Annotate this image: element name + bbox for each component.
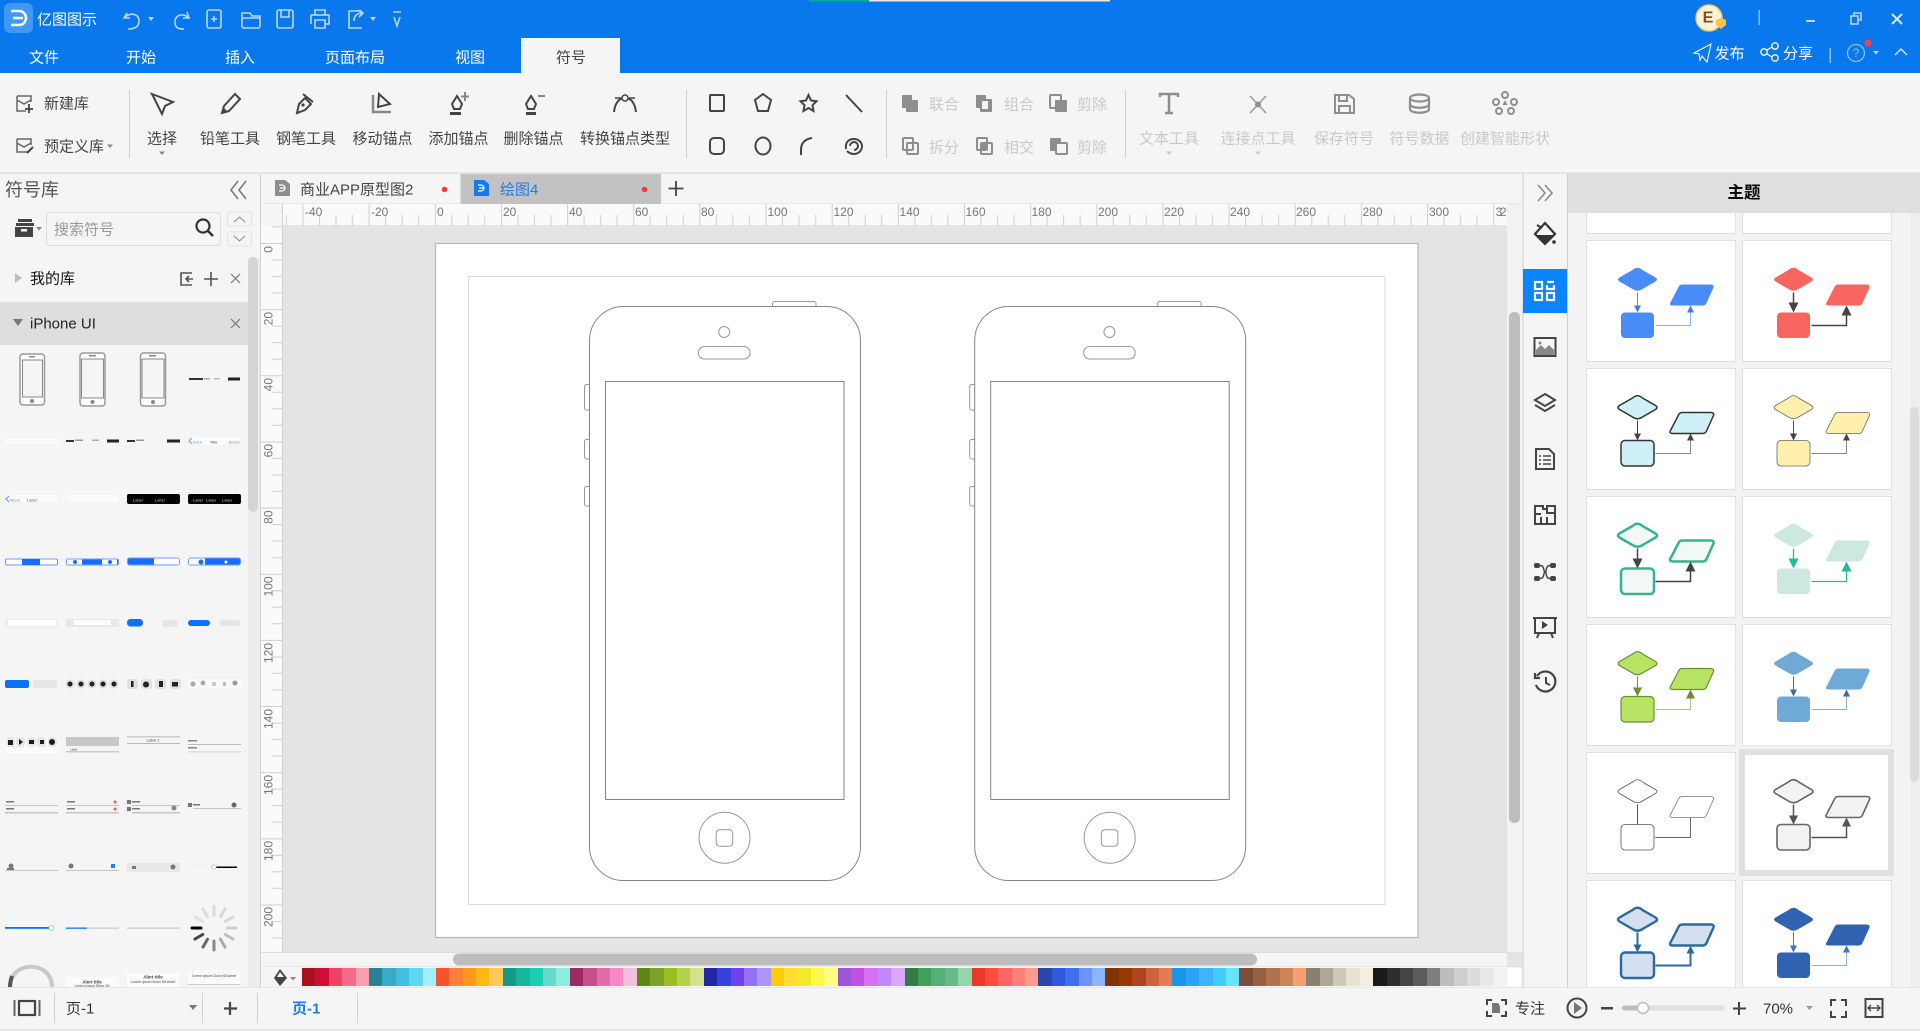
navigation bars: Label bbox=[222, 498, 232, 502]
tool: pen: 钢笔工具 bbox=[276, 130, 336, 148]
tool: save symbol: 保存符号 bbox=[1314, 130, 1374, 148]
tab: 商业APP原型图2: 商业APP原型图2 bbox=[300, 182, 413, 198]
vertical ruler: 40 bbox=[262, 378, 276, 391]
canvas scrollbars bbox=[261, 204, 1523, 987]
predefined library: 预定义库 bbox=[44, 138, 104, 156]
theme card: green outline bbox=[1586, 496, 1736, 618]
lists bbox=[5, 736, 241, 754]
horizontal ruler: 200 bbox=[1098, 205, 1118, 219]
tool: add anchor bbox=[428, 92, 489, 148]
menu tabs: 文件 bbox=[29, 50, 59, 66]
vertical ruler: 180 bbox=[262, 841, 276, 861]
page selector bbox=[66, 1000, 197, 1018]
lists: Label bbox=[70, 748, 78, 752]
vertical ruler: 100 bbox=[262, 576, 276, 597]
page bbox=[436, 244, 1418, 938]
tool: move anchor: 移动锚点 bbox=[352, 130, 413, 148]
window controls and user bbox=[1694, 5, 1907, 63]
icon: page view bbox=[14, 1000, 40, 1016]
navigation bars: Label bbox=[133, 498, 143, 502]
share button: 分享 bbox=[1783, 46, 1813, 62]
symbol thumbnails bbox=[5, 353, 241, 989]
theme card: cyan bbox=[1586, 368, 1736, 490]
new library: 新建库 bbox=[44, 96, 89, 112]
iphone ui row: iPhone UI bbox=[30, 316, 96, 332]
tool: pencil bbox=[200, 94, 260, 148]
panel: symbol library bbox=[0, 174, 261, 989]
shape tools bbox=[710, 94, 862, 155]
menu tabs: 开始 bbox=[126, 50, 156, 66]
phones bbox=[20, 353, 166, 406]
tool: delete anchor: 删除锚点 bbox=[503, 130, 564, 148]
theme card: yellow bbox=[1742, 368, 1892, 490]
tab: 绘图4 bbox=[461, 174, 661, 204]
vertical ruler: 120 bbox=[262, 643, 276, 663]
active page tab: 页-1 bbox=[292, 1000, 320, 1018]
theme card: navy bbox=[1742, 880, 1892, 987]
tool: text bbox=[1139, 94, 1199, 155]
horizontal ruler: 220 bbox=[1164, 205, 1184, 219]
tool: pen bbox=[276, 94, 336, 148]
boolean tools: 剪除 bbox=[1077, 96, 1107, 114]
tab: 商业APP原型图2 bbox=[275, 180, 447, 198]
sliders bbox=[5, 926, 180, 930]
icon: fullscreen bbox=[1831, 1000, 1846, 1017]
navigation bars: Label bbox=[193, 498, 203, 502]
panel: theme bbox=[1568, 174, 1920, 1002]
navigation bars: Label bbox=[27, 498, 37, 502]
tool: connection point bbox=[1220, 96, 1296, 155]
zoom control bbox=[1601, 1000, 1813, 1018]
menu tabs: 页面布局 bbox=[325, 50, 385, 66]
scrollbar bbox=[1910, 213, 1920, 988]
menu tabs: 符号 bbox=[556, 50, 586, 66]
horizontal ruler: 280 bbox=[1362, 205, 1383, 219]
vertical ruler: 20 bbox=[262, 312, 276, 325]
horizontal ruler: 300 bbox=[1429, 205, 1449, 219]
icon: library box bbox=[15, 219, 42, 237]
horizontal ruler: 80 bbox=[701, 205, 715, 219]
gauge and alerts: Lorem Ipsum Dolor Sit bbox=[75, 984, 109, 988]
icon: collapse bbox=[231, 181, 246, 199]
vertical ruler: 160 bbox=[262, 775, 276, 795]
horizontal ruler: 260 bbox=[1296, 205, 1316, 219]
horizontal ruler: -20 bbox=[371, 205, 389, 219]
icon: help bbox=[1848, 40, 1879, 62]
horizontal ruler: 20 bbox=[503, 205, 517, 219]
iphone left bbox=[584, 302, 860, 880]
horizontal ruler: 240 bbox=[1230, 205, 1250, 219]
icon: floor plan bbox=[1535, 506, 1555, 524]
icon: fill bucket bbox=[274, 969, 296, 986]
my library row: 我的库 bbox=[30, 270, 75, 288]
tool: select bbox=[147, 94, 177, 155]
horizontal ruler: 100 bbox=[768, 205, 788, 219]
predefined library bbox=[17, 138, 113, 156]
focus button: 专注 bbox=[1515, 1000, 1545, 1018]
vertical ruler: 200 bbox=[262, 907, 276, 927]
tool: connection point: 连接点工具 bbox=[1220, 130, 1296, 148]
status bars bbox=[66, 378, 240, 442]
horizontal ruler: 180 bbox=[1032, 205, 1052, 219]
icon: add page bbox=[224, 1002, 237, 1015]
share button bbox=[1761, 43, 1813, 62]
icon: user avatar bbox=[1696, 5, 1726, 31]
navigation bars: Menu bbox=[10, 498, 20, 502]
horizontal ruler: 140 bbox=[900, 205, 920, 219]
icon: history bbox=[1535, 671, 1555, 691]
icon: add tab bbox=[668, 181, 684, 196]
zoom control: 70% bbox=[1763, 1000, 1793, 1018]
icon: theme (active) bbox=[1523, 269, 1567, 313]
boolean tools: 联合 bbox=[929, 96, 959, 114]
status bar bbox=[0, 988, 1920, 1031]
icon: user avatar: E bbox=[1703, 10, 1714, 26]
icon: app logo bbox=[4, 3, 33, 33]
tool: move anchor bbox=[352, 94, 413, 148]
icon: fit width bbox=[1866, 999, 1882, 1017]
theme card: steel blue bbox=[1742, 624, 1892, 746]
theme heading: 主题 bbox=[1728, 183, 1761, 202]
publish button bbox=[1694, 44, 1745, 62]
iphone ui row bbox=[0, 302, 248, 345]
theme card: white outline bbox=[1586, 752, 1736, 874]
tool: smart shape: 创建智能形状 bbox=[1460, 130, 1550, 148]
navigation bars: Title bbox=[210, 440, 218, 444]
new library bbox=[17, 96, 89, 113]
cards partial top bbox=[1586, 213, 1892, 234]
my library row bbox=[15, 270, 240, 288]
navigation bars: Label bbox=[155, 498, 165, 502]
icon: mind map bbox=[1534, 563, 1556, 581]
boolean tools bbox=[902, 95, 1107, 156]
boolean tools: 组合 bbox=[1004, 96, 1034, 114]
lists: Label 1 bbox=[146, 738, 160, 742]
page selector: 页-1 bbox=[66, 1000, 94, 1018]
search box: 搜索符号 bbox=[54, 222, 114, 238]
horizontal ruler: -40 bbox=[305, 205, 323, 219]
ribbon bbox=[0, 73, 1920, 174]
gauge and alerts: Lorem Ipsum Dolor Sit Amet bbox=[131, 980, 175, 984]
icon: layers bbox=[1535, 394, 1555, 411]
icon: document bbox=[1536, 449, 1554, 469]
navigation bars: Action bbox=[229, 440, 240, 444]
scrollbar bbox=[248, 257, 260, 988]
icon: expand bbox=[1538, 185, 1552, 201]
vertical ruler bbox=[261, 204, 283, 952]
horizontal ruler: 60 bbox=[635, 205, 649, 219]
navigation bars bbox=[6, 437, 241, 504]
title bar bbox=[0, 0, 1920, 73]
theme card: selected grey bbox=[1742, 752, 1891, 873]
vertical ruler: 80 bbox=[262, 510, 276, 524]
menu tabs: 插入 bbox=[225, 50, 255, 66]
horizontal ruler: 0 bbox=[437, 205, 444, 219]
document tabs bbox=[261, 173, 1523, 204]
theme card: blue bbox=[1586, 240, 1736, 362]
menu tabs: 视图 bbox=[455, 50, 485, 66]
tool: add anchor: 添加锚点 bbox=[428, 130, 489, 148]
tool: save symbol bbox=[1314, 95, 1374, 148]
icon: fill bbox=[1535, 223, 1556, 244]
tool: select: 选择 bbox=[147, 130, 177, 148]
tool: convert anchor: 转换锚点类型 bbox=[580, 130, 670, 148]
gauge and alerts bbox=[10, 967, 240, 989]
theme card: lime bbox=[1586, 624, 1736, 746]
iphone right bbox=[970, 302, 1246, 880]
gauge and alerts: Lorem Ipsum Dolor Sit Amet bbox=[192, 974, 236, 978]
right tool strip bbox=[1522, 174, 1568, 988]
horizontal ruler: 120 bbox=[834, 205, 854, 219]
search box bbox=[46, 212, 220, 246]
canvas area bbox=[283, 226, 1507, 952]
vertical ruler: 0 bbox=[262, 246, 276, 253]
theme heading bbox=[1568, 174, 1920, 213]
colour palette bar bbox=[261, 967, 1523, 987]
horizontal ruler: 160 bbox=[966, 205, 986, 219]
theme card: red bbox=[1742, 240, 1892, 362]
app name: 亿图图示 bbox=[37, 12, 97, 28]
gauge and alerts: Alert title bbox=[143, 974, 163, 980]
boolean tools: 拆分 bbox=[929, 140, 959, 156]
menu tabs bbox=[29, 38, 620, 74]
tool: symbol data bbox=[1389, 94, 1450, 148]
icon: image bbox=[1534, 338, 1556, 356]
tool: text: 文本工具 bbox=[1139, 130, 1199, 148]
icon: play bbox=[1568, 998, 1586, 1018]
colour palette swatches bbox=[302, 968, 1521, 986]
horizontal ruler bbox=[261, 204, 1523, 226]
gauge and alerts: Alert title bbox=[82, 980, 102, 984]
tool: convert anchor bbox=[580, 95, 670, 148]
theme card: mint bbox=[1742, 496, 1892, 618]
spinner bbox=[192, 906, 236, 950]
navigation bars: Back bbox=[193, 440, 202, 444]
buttons and icon sets bbox=[5, 679, 241, 689]
focus button bbox=[1487, 1000, 1545, 1018]
boolean tools: 相交 bbox=[1004, 138, 1034, 156]
tab: 绘图4: 绘图4 bbox=[500, 182, 538, 198]
navigation bars: Label bbox=[206, 498, 216, 502]
tool: symbol data: 符号数据 bbox=[1389, 130, 1450, 148]
vertical ruler: 140 bbox=[262, 709, 276, 729]
horizontal ruler: 40 bbox=[569, 205, 583, 219]
segmented controls bbox=[6, 558, 240, 565]
icon: presentation bbox=[1533, 618, 1557, 638]
icon: help: ? bbox=[1853, 46, 1860, 60]
search bars and bubbles bbox=[5, 619, 240, 627]
tool: delete anchor bbox=[503, 96, 564, 148]
scroll buttons bbox=[228, 212, 252, 246]
theme card: blue outline bbox=[1586, 880, 1736, 987]
horizontal ruler: 32 bbox=[1496, 205, 1507, 219]
quick access toolbar bbox=[124, 10, 401, 29]
tool: smart shape bbox=[1460, 92, 1550, 148]
panel heading: 符号库 bbox=[5, 180, 59, 200]
publish button: 发布 bbox=[1714, 46, 1745, 62]
tool: pencil: 铅笔工具 bbox=[200, 130, 260, 148]
vertical ruler: 60 bbox=[262, 444, 276, 457]
boolean tools: 剪除 bbox=[1077, 140, 1107, 156]
